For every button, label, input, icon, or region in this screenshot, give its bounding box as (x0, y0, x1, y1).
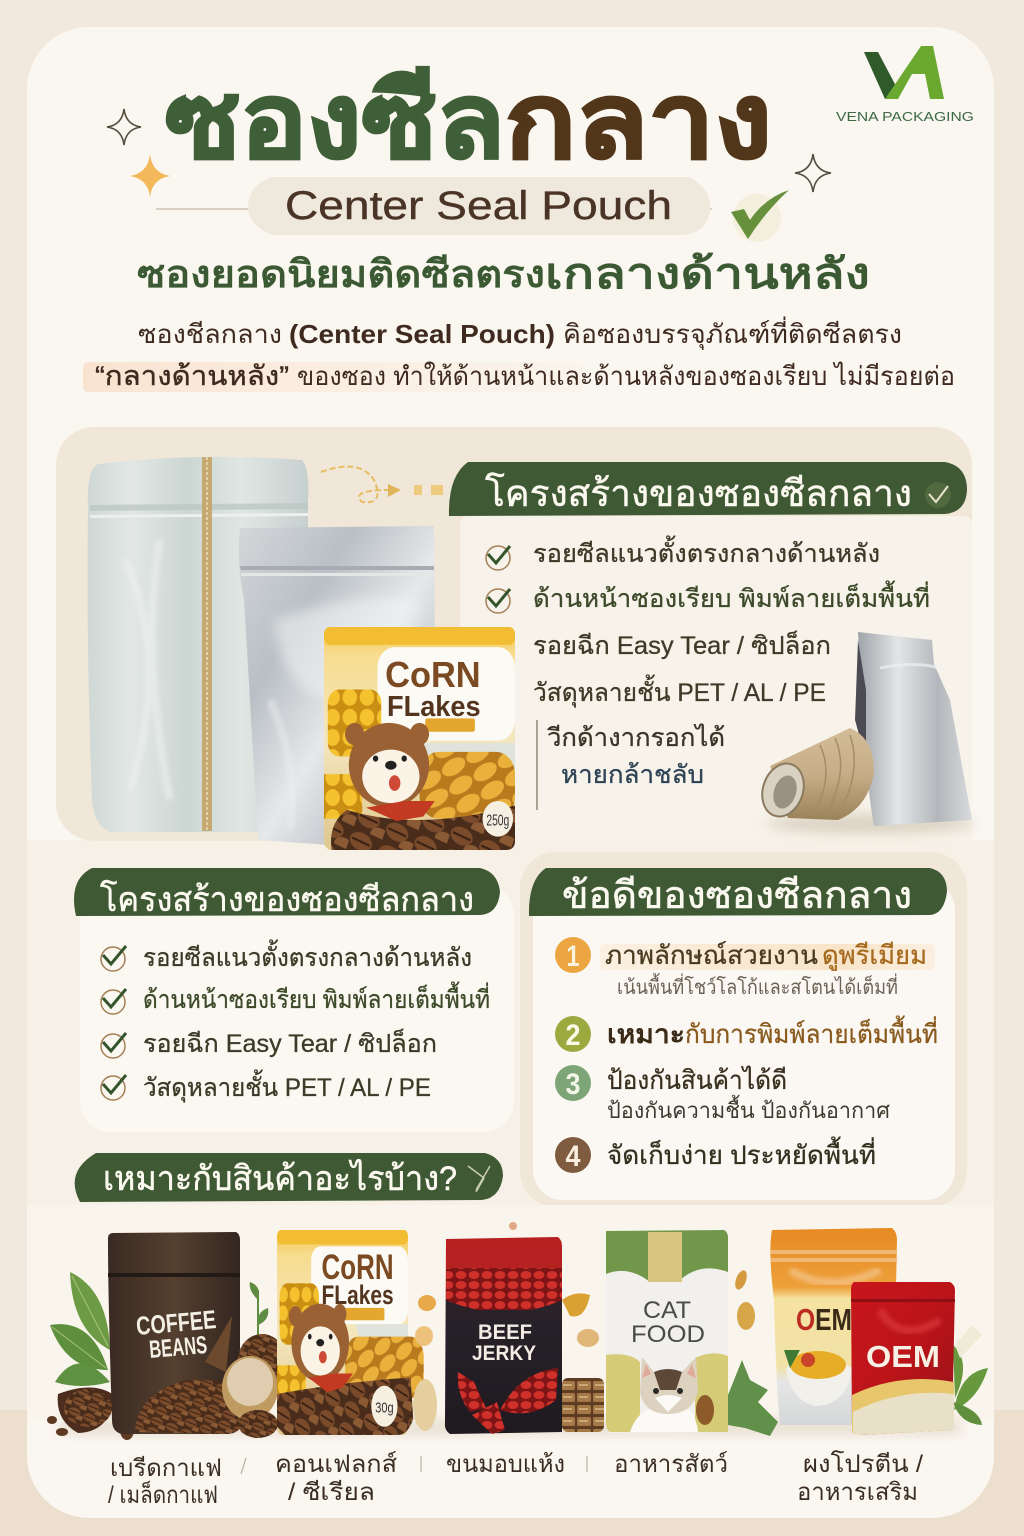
intro paragraph: ของซอง ทำให้ด้านหน้าและด้านหลังของซองเรียบ ไม่มีรอยต่อ (297, 361, 955, 391)
label: coffee (108, 1455, 222, 1509)
list item 2: ด้านหน้าซองเรียบ พิมพ์ลายเต็มพื้นที่ (143, 981, 490, 1014)
benefit 1: เน้นพื้นที่โชว์โลโก้และสโตนได้เต็มที่ (617, 973, 898, 999)
benefit 1 (555, 937, 935, 999)
product: Cat Food pouch: CAT (643, 1297, 691, 1324)
benefit 4: 4 (566, 1140, 581, 1173)
arrow: dashed connector (321, 467, 443, 502)
item text 2: ด้านหน้าซองเรียบ พิมพ์ลายเต็มพื้นที่ (533, 580, 930, 613)
list: structure (top) (486, 535, 930, 810)
intro paragraph: “กลางด้านหลัง” (95, 361, 289, 391)
label: protein: อาหารเสริม (797, 1479, 918, 1506)
decor: leaves right (953, 1325, 988, 1425)
label: protein (797, 1450, 923, 1506)
heading (74, 868, 500, 919)
illustration: Corn Flakes pouch: FLakes (387, 690, 481, 723)
product: Corn Flakes pouch: CoRN (322, 1249, 394, 1288)
benefit 3 (555, 1065, 890, 1123)
headline (137, 250, 870, 297)
panel: benefits (520, 852, 967, 1207)
item text 6: หายกล้าชลับ (561, 761, 704, 789)
heading: structure (top) (449, 462, 967, 516)
product: OEM orange pouch (770, 1228, 897, 1425)
sparkle icons (107, 109, 831, 197)
title (165, 64, 772, 180)
list item 3: รอยฉีก Easy Tear / ซิปล็อก (143, 1028, 437, 1058)
benefit 3: 3 (566, 1068, 580, 1101)
title: ซองซีล (165, 64, 505, 180)
benefit 2: กับการพิมพ์ลายเต็มพื้นที่ (685, 1015, 938, 1049)
logo: Vena Packaging (836, 46, 974, 124)
icon: green check (731, 190, 789, 242)
product: Corn Flakes pouch (277, 1230, 424, 1435)
illustration: white pouch with centre seal (88, 457, 308, 832)
illustration: silver pouch (239, 526, 435, 845)
panel: structure (left) (74, 868, 514, 1132)
product labels (108, 1450, 923, 1509)
product: Corn Flakes pouch: FLakes (322, 1280, 394, 1310)
benefit 1: 1 (566, 940, 580, 973)
subtitle pill: Center Seal Pouch (156, 177, 712, 235)
product: Beef Jerky pouch: JERKY (472, 1342, 536, 1365)
list item 1: รอยซีลแนวตั้งตรงกลางด้านหลัง (143, 939, 472, 972)
benefit 3: ป้องกันสินค้าได้ดี (607, 1065, 787, 1095)
illustration: Corn Flakes pouch: CoRN (385, 656, 481, 696)
benefit 2: 2 (566, 1019, 580, 1052)
illustration: foil bag and kraft roll (756, 632, 975, 834)
intro paragraph: ซองชีลกลาง (138, 319, 282, 349)
heading: suitable products: เหมาะกับสินค้าอะไรบ้าง? (103, 1159, 457, 1198)
benefit 3: ป้องกันความชื้น ป้องกันอากาศ (607, 1095, 890, 1123)
item text 5: วีกด้างากรอกได้ (547, 723, 725, 752)
label: snack: ขนมอบแห้ง (446, 1451, 565, 1478)
products band floor (27, 1205, 994, 1434)
label: protein: ผงโปรตีน / (803, 1450, 923, 1478)
product: OEM red pouch: OEM (866, 1339, 940, 1374)
item text 1: รอยซีลแนวตั้งตรงกลางด้านหลัง (533, 535, 880, 568)
decor: cat-food kibble (728, 1269, 778, 1436)
product: Coffee Beans pouch: COFFEE (135, 1304, 217, 1341)
list item 4: วัสดุหลายชั้น PET / AL / PE (143, 1069, 431, 1103)
label: corn flakes: / ซีเรียล (288, 1479, 375, 1506)
subtitle pill: Center Seal Pouch: Center Seal Pouch (285, 184, 672, 228)
headline: ซองยอดนิยมติดซีลตรง (137, 254, 545, 296)
item text 4: วัสดุหลายชั้น PET / AL / PE (533, 674, 826, 708)
product: bowl and sprout (222, 1282, 286, 1438)
benefit 4 (555, 1136, 876, 1173)
logo: Vena Packaging: VENA PACKAGING (836, 109, 974, 124)
label: corn flakes (275, 1450, 397, 1506)
benefit 2 (555, 1015, 938, 1052)
heading: suitable products (75, 1153, 503, 1202)
product: Cat Food pouch: FOOD (631, 1321, 705, 1348)
icon: check 2 (486, 589, 510, 613)
product: Corn Flakes pouch: 30g (375, 1399, 394, 1416)
product: Cat Food pouch (606, 1230, 728, 1433)
product: Coffee Beans pouch (108, 1232, 240, 1434)
headline: เกลางด้านหลัง (545, 250, 870, 297)
intro paragraph: คิอซองบรรจุภัณฑ์ที่ติดซีลตรง (563, 316, 902, 350)
heading: ข้อดีของซองซีลกลาง (562, 875, 912, 917)
heading: โครงสร้างของซองซีลกลาง (100, 880, 474, 919)
benefit 4: จัดเก็บง่าย ประหยัดพื้นที่ (607, 1136, 876, 1170)
title: กลาง (505, 64, 772, 180)
product: Coffee Beans pouch: BEANS (148, 1331, 208, 1364)
benefit 1: ภาพลักษณ์สวยงาน (605, 940, 818, 970)
label: coffee: / เมล็ดกาแฟ (108, 1480, 218, 1509)
intro paragraph: (Center Seal Pouch) (289, 319, 555, 349)
illustration: leaves and beans left (47, 1272, 134, 1440)
intro paragraph (83, 316, 955, 392)
product: OEM orange pouch: OEM (796, 1302, 852, 1337)
icon: check 1 (486, 546, 510, 570)
product: OEM red pouch (851, 1282, 955, 1435)
product: Beef Jerky pouch: BEEF (478, 1321, 532, 1344)
item text 3: รอยฉีก Easy Tear / ซิปล็อก (533, 630, 831, 660)
decor: snacks (413, 1222, 604, 1432)
benefit 2: เหมาะ (607, 1019, 685, 1049)
illustration: Corn Flakes pouch (324, 627, 515, 850)
label: coffee: เบรีดกาแฟ (110, 1455, 222, 1482)
heading: structure (top): โครงสร้างของซองซีลกลาง (485, 472, 912, 514)
label: corn flakes: คอนเฟลกส์ (275, 1450, 397, 1478)
illustration: Corn Flakes pouch: 250g (486, 813, 509, 830)
benefit 1: ดูพรีเมียม (822, 940, 927, 971)
product: Beef Jerky pouch (445, 1237, 562, 1434)
label: pet food: อาหารสัตว์ (614, 1450, 728, 1478)
